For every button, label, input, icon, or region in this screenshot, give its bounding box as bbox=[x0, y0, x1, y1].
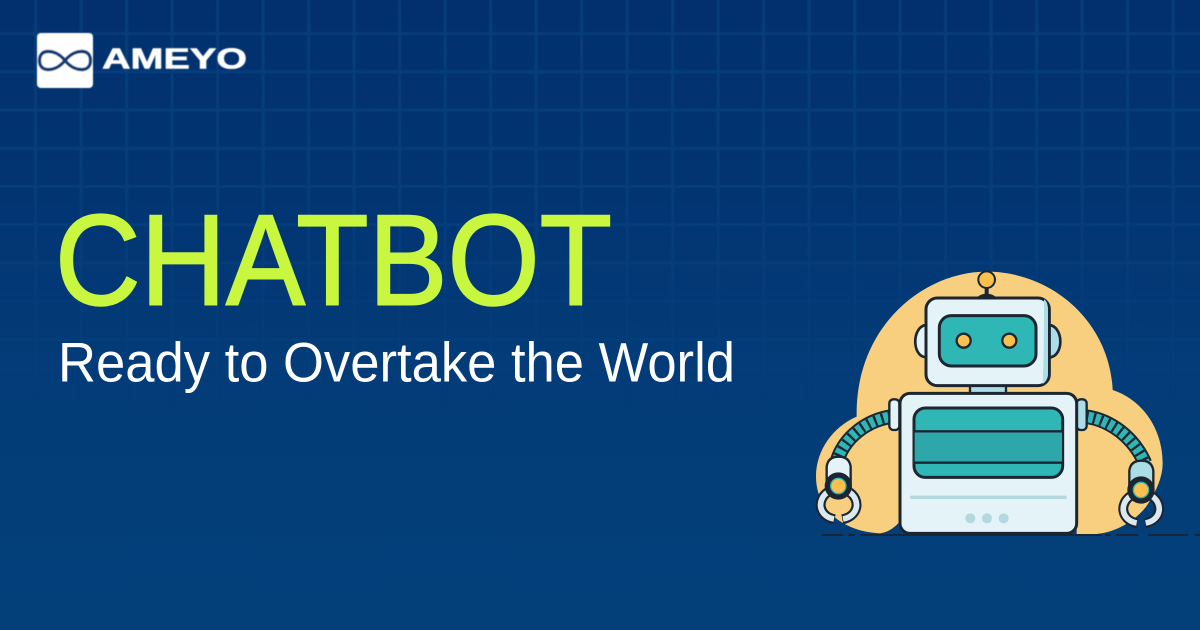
logo wordmark: AMEYO bbox=[102, 44, 247, 76]
icon: infinity logo mark bbox=[37, 33, 93, 88]
body stripe bbox=[910, 496, 1067, 499]
right gripper bbox=[1123, 461, 1159, 523]
robot body bbox=[900, 393, 1077, 533]
body dots bbox=[965, 513, 1009, 523]
yellow cloud backdrop bbox=[816, 272, 1163, 534]
left gripper bbox=[821, 457, 857, 519]
robot head bbox=[926, 298, 1049, 386]
ground line bbox=[822, 532, 1200, 538]
antenna bbox=[977, 271, 997, 297]
chest screen bbox=[914, 408, 1063, 477]
logo: Ameyo bbox=[37, 33, 247, 88]
title: CHATBOT bbox=[55, 188, 612, 332]
background bbox=[0, 0, 1200, 298]
subtitle: Ready to Overtake the World bbox=[58, 330, 735, 394]
illustration: robot bbox=[816, 271, 1200, 535]
left arm bbox=[821, 399, 899, 519]
ears bbox=[915, 325, 1060, 357]
right arm bbox=[1077, 399, 1159, 523]
neck bbox=[970, 384, 1006, 395]
